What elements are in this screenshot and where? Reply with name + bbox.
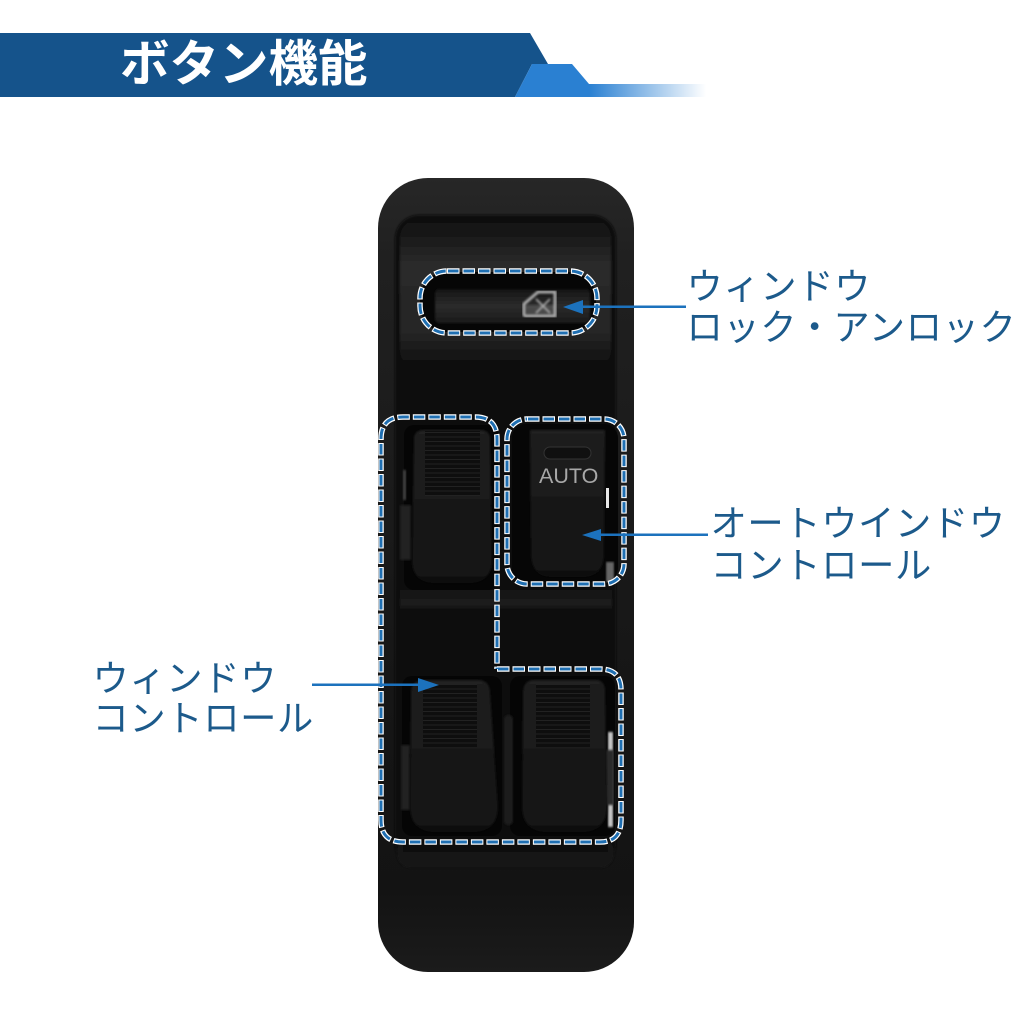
lock button — [420, 272, 596, 332]
label: window lock: ウィンドウ — [686, 266, 871, 307]
label: window control: コントロール — [92, 698, 314, 739]
AUTO label: AUTO — [539, 464, 598, 488]
icon: window lock — [524, 292, 555, 316]
label: window lock: ロック・アンロック — [686, 307, 1016, 348]
label: auto window control: オートウインドウ — [710, 503, 1006, 544]
switch: AUTO — [512, 424, 618, 582]
label: window control: ウィンドウ — [92, 658, 277, 699]
arrow: window lock — [563, 300, 686, 314]
label: window lock — [686, 266, 1016, 348]
arrow: window control — [312, 678, 439, 692]
title banner — [0, 33, 706, 97]
highlight: window controls — [381, 417, 621, 842]
switch: bottom left — [401, 676, 502, 836]
switch: bottom right — [504, 676, 615, 836]
panel recess — [395, 215, 616, 868]
highlight: window lock — [420, 271, 597, 333]
label: auto window control — [710, 503, 1006, 586]
label: auto window control: コントロール — [710, 545, 932, 586]
highlight: auto window — [507, 419, 624, 584]
switch: top left — [400, 425, 498, 590]
heading: ボタン機能 — [120, 37, 368, 92]
arrow: auto window — [582, 529, 708, 541]
label: window control — [92, 658, 314, 739]
window switch panel photo — [378, 178, 634, 972]
